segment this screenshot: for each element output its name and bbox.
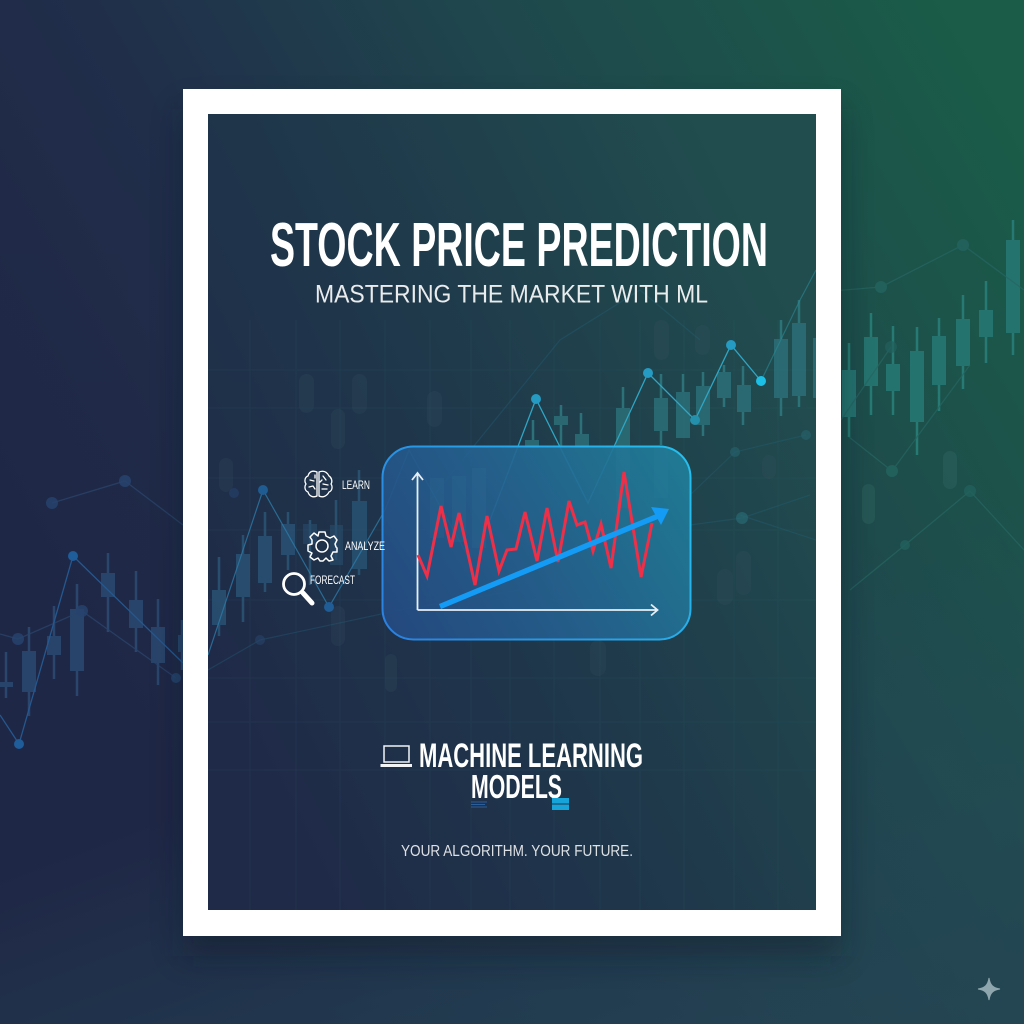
heading: machine learning models: MACHINE LEARNING <box>419 737 643 775</box>
icon: server bars <box>471 798 569 810</box>
label: analyze: ANALYZE <box>345 541 385 553</box>
tagline: YOUR ALGORITHM. YOUR FUTURE. <box>401 843 633 860</box>
chart: poster trend lines behind panel <box>208 270 816 670</box>
faint candles inside panel <box>430 448 668 548</box>
chart: poster right candlesticks <box>525 300 819 448</box>
subtitle: MASTERING THE MARKET WITH ML <box>315 280 708 308</box>
label: learn: LEARN <box>342 480 370 492</box>
icon: magnifier <box>284 574 312 603</box>
white poster frame <box>183 89 841 936</box>
chart axes <box>412 473 658 616</box>
grid lines <box>208 600 340 910</box>
chart: left background candlesticks <box>0 553 184 716</box>
blue trend arrow <box>439 507 669 609</box>
heading: machine learning models: MODELS <box>471 768 562 805</box>
chart: right background trend lines <box>820 239 1024 590</box>
frame shadow <box>183 109 841 956</box>
chart: right background candlesticks <box>842 220 1020 524</box>
chart panel <box>382 446 690 640</box>
label: forecast: FORECAST <box>310 573 355 587</box>
chart: left background trend lines <box>0 475 183 749</box>
icon: gear <box>308 532 337 561</box>
icon: brain <box>305 471 332 497</box>
poster panel <box>208 114 819 910</box>
chart: poster left candlesticks <box>212 470 367 636</box>
red price line <box>418 472 652 585</box>
icon: sparkle <box>978 978 1000 1000</box>
heading: machine learning models <box>419 737 643 805</box>
faded capsules <box>219 320 776 692</box>
icon: laptop <box>380 746 412 766</box>
